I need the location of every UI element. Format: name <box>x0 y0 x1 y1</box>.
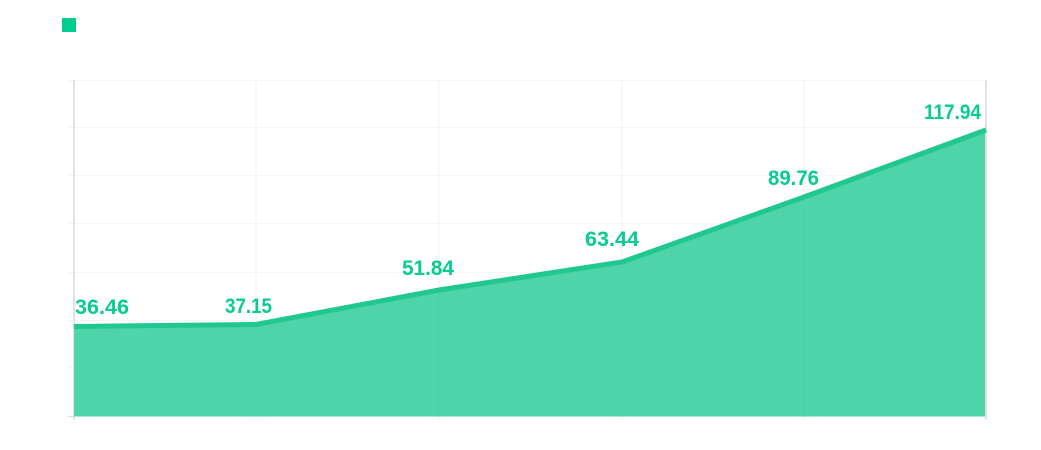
area fill <box>74 130 985 416</box>
data labels: 63.44 <box>585 227 639 251</box>
legend swatch <box>62 18 76 32</box>
trend line <box>74 130 986 326</box>
data labels: 89.76 <box>768 166 819 190</box>
data labels: 51.84 <box>402 256 454 280</box>
data labels: 36.46 <box>75 295 129 319</box>
data labels: 37.15 <box>225 294 272 318</box>
data labels: 117.94 <box>924 100 981 124</box>
data labels <box>75 100 981 319</box>
